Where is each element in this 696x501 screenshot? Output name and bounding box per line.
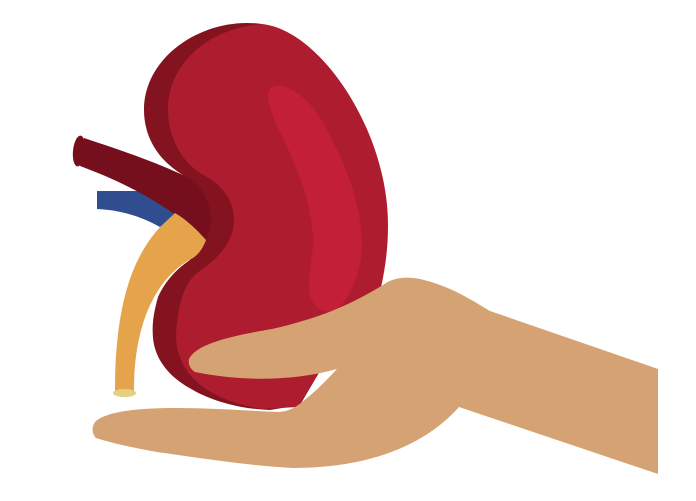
kidney: dark outer shell	[144, 23, 380, 410]
hand and forearm	[93, 278, 658, 474]
kidney: red main body	[168, 24, 388, 409]
vessel: blue vein	[97, 191, 178, 227]
ureter end cap	[113, 389, 136, 397]
vessel: dark red artery	[71, 135, 211, 240]
kidney: bright highlight	[268, 86, 362, 311]
vessel: orange ureter	[113, 213, 206, 397]
artery opening	[71, 135, 87, 167]
